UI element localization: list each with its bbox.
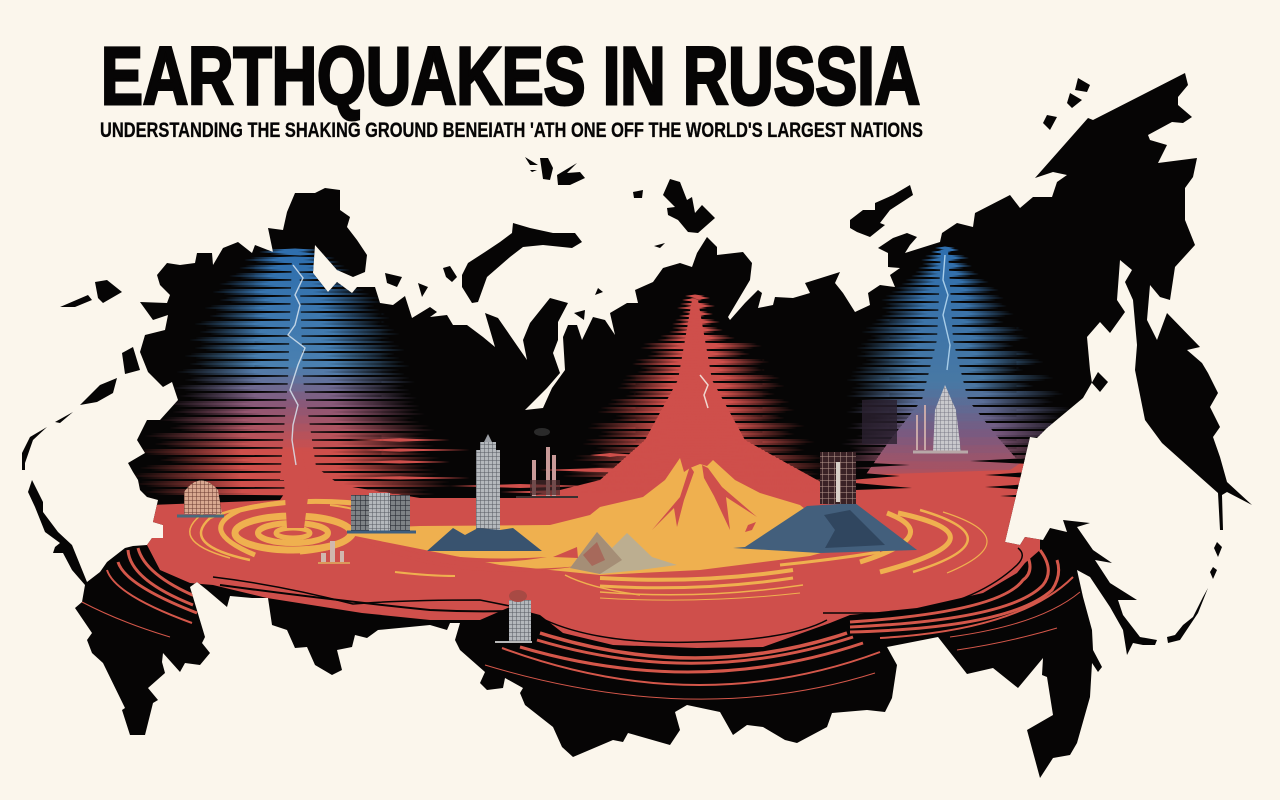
thin black lines over lava <box>213 548 1022 642</box>
lava body <box>130 294 1040 648</box>
yellow ripple arcs right <box>780 510 987 573</box>
dark mountains <box>427 528 542 551</box>
subtitle: UNDERSTANDING THE SHAKING GROUND BENEIATH 'ATH ONE OFF THE WORLD'S LARGEST NATIONS <box>100 119 923 142</box>
left blue seismic column <box>129 248 455 496</box>
chimneys <box>516 428 578 497</box>
volcano lava streaks <box>458 458 757 570</box>
faded tower <box>862 385 968 452</box>
blue-gray mountain <box>733 503 917 553</box>
building: dome <box>177 480 224 516</box>
left eruption column <box>284 480 308 528</box>
rubble mountains <box>553 532 677 574</box>
concentric shock rings <box>82 547 1080 699</box>
lightning volcano <box>700 375 708 408</box>
right blue seismic column <box>844 246 1068 481</box>
yellow ripple rings left <box>190 500 380 560</box>
seismic scene clipped to map <box>82 246 1084 699</box>
lightning left <box>288 265 305 465</box>
lattice tower <box>820 452 856 504</box>
small factory <box>318 541 350 563</box>
lower tower <box>495 590 532 642</box>
yellow ground <box>350 458 850 575</box>
lightning right <box>943 255 950 370</box>
title: EARTHQUAKES IN RUSSIA <box>101 31 920 122</box>
black wedges right <box>850 458 1030 498</box>
building: office block <box>347 493 416 532</box>
islands <box>22 78 1222 643</box>
skyscraper <box>476 434 500 535</box>
yellow arcs lower <box>395 570 803 600</box>
